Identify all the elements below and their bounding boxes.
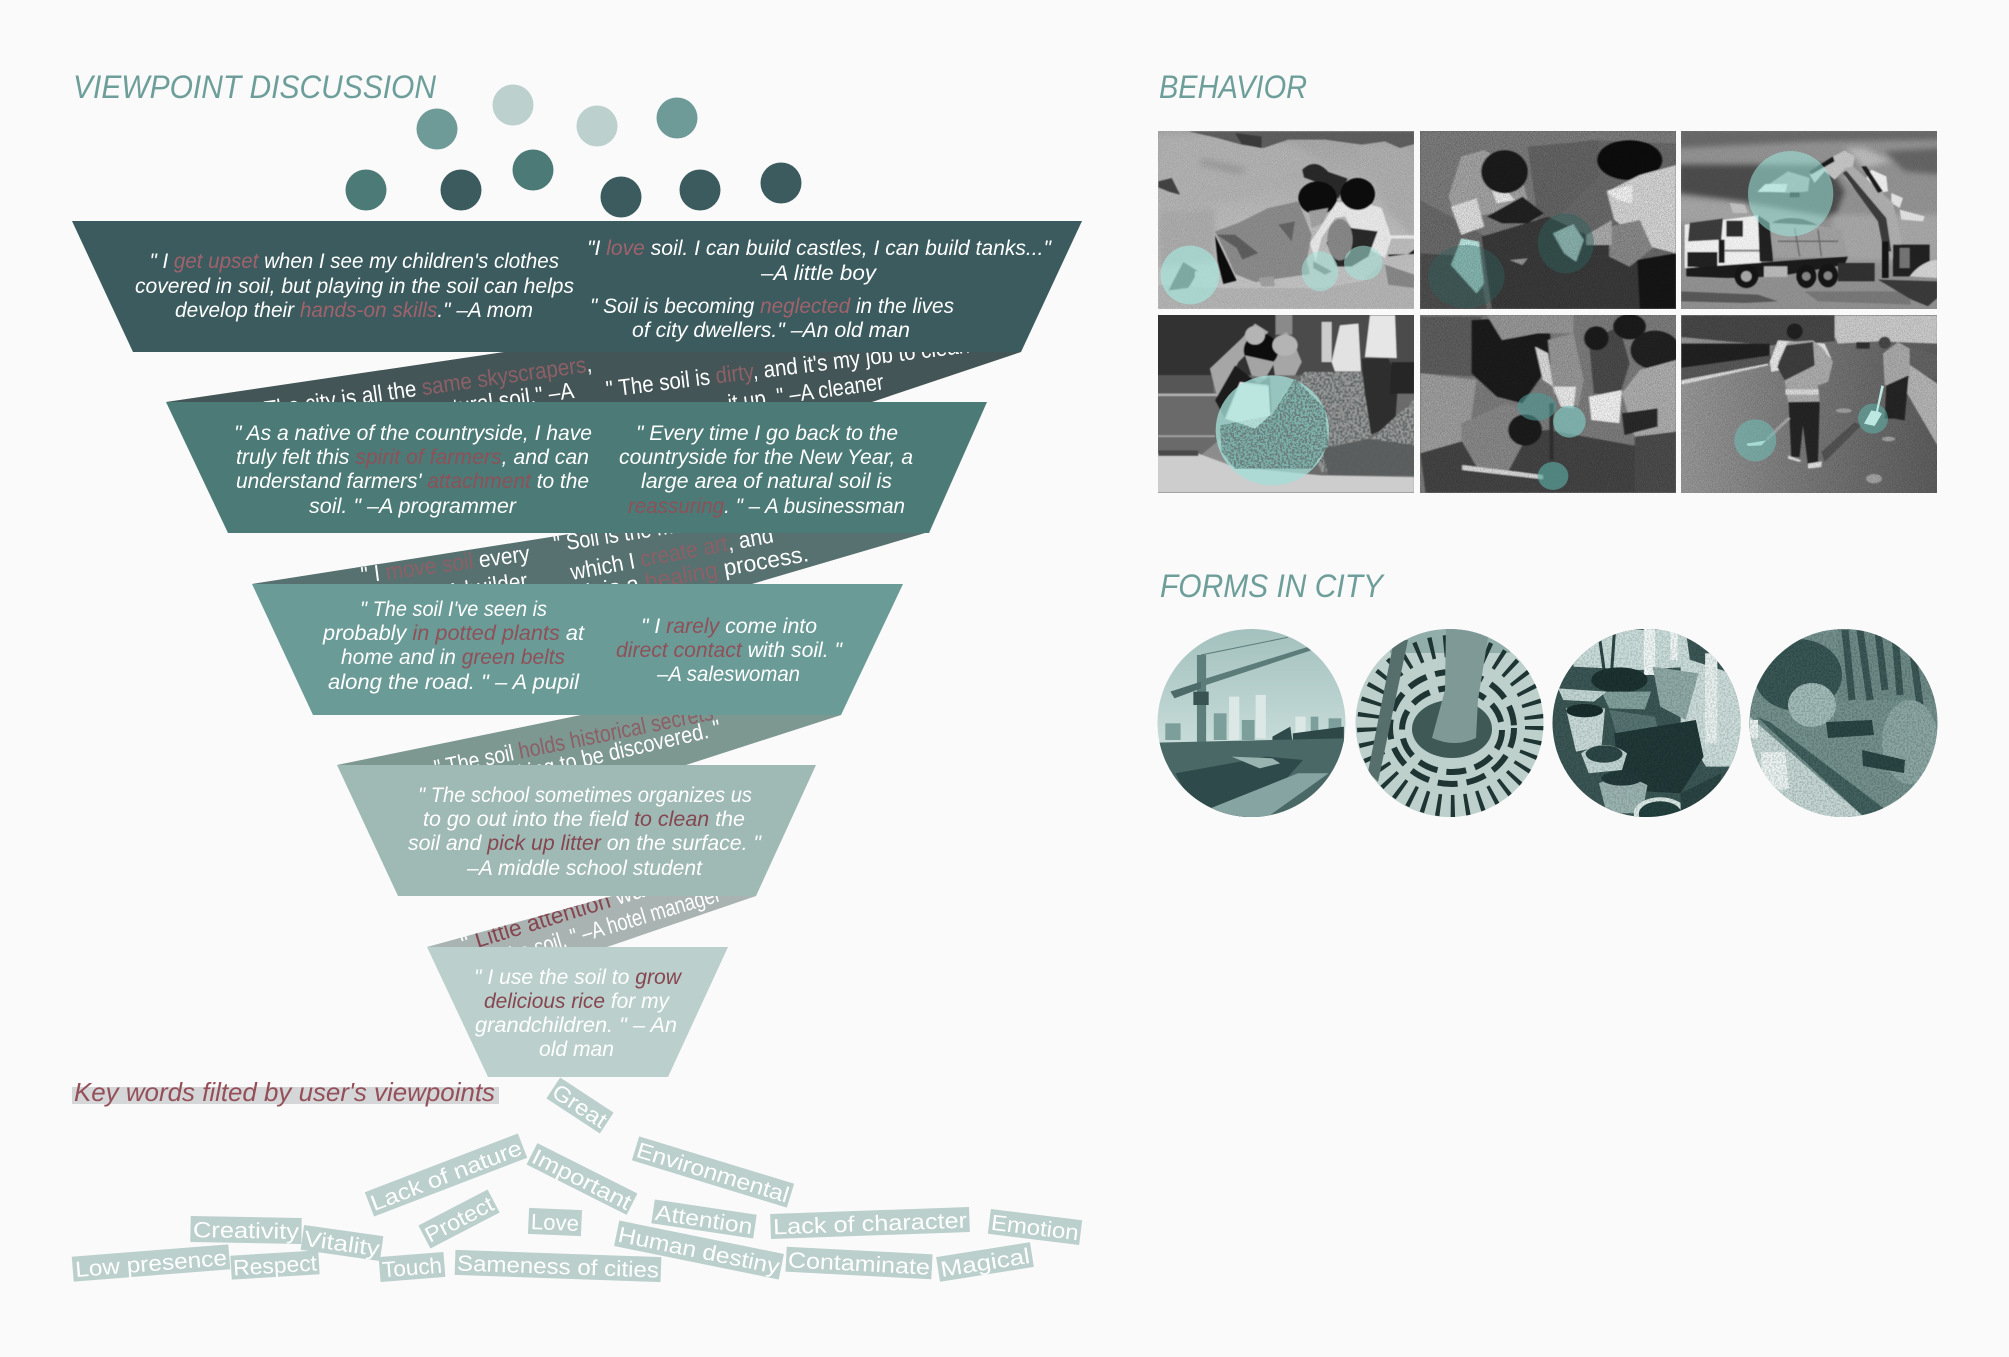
funnel tier 2: soil. " –A programmer <box>309 495 517 518</box>
funnel tier 1: –A little boy <box>760 262 878 285</box>
photo: excavator loading dump truck <box>1678 128 1941 311</box>
funnel band 3 back side: waiting to be discovered. " <box>490 714 723 792</box>
funnel tier 2: countryside for the New Year, a <box>619 446 913 469</box>
keyword tags: Touch <box>381 1253 443 1282</box>
funnel band 2 back side: " I move soil every <box>359 540 532 588</box>
keyword tags: Sameness of cities <box>457 1250 659 1283</box>
funnel band 4 back side: " Little attention was paid <box>458 859 705 957</box>
funnel tier 3: direct contact with soil. " <box>616 639 844 662</box>
circle photo: potted plants on balcony <box>1552 629 1740 817</box>
keyword tags: Environmental <box>634 1137 792 1208</box>
funnel band 1 back side: " The soil is dirty, and it's my job to clean <box>604 332 971 402</box>
funnel band 2 back side: which I create art, and <box>567 521 775 585</box>
funnel tier 5: old man <box>539 1038 614 1061</box>
funnel tier 5: " I use the soil to grow <box>474 966 683 989</box>
funnel band 1 back side: it up. " –A cleaner <box>726 368 885 416</box>
funnel tier 4 <box>337 765 816 896</box>
panel: behavior photos <box>1155 128 1941 495</box>
heading: behavior: BEHAVIOR <box>1159 69 1307 105</box>
funnel tier 4: " The school sometimes organizes us <box>418 784 752 807</box>
funnel tier 2: " As a native of the countryside, I have <box>234 422 592 445</box>
funnel band 2 back side: it is a healing process. <box>584 540 810 605</box>
funnel tier 3: along the road. " – A pupil <box>328 671 580 694</box>
photo: girls planting in soil <box>1415 128 1681 312</box>
keyword tags: Great <box>548 1079 612 1133</box>
keyword tags: Respect <box>232 1250 318 1281</box>
funnel band 4 back side: to the soil. " –A hotel manager <box>482 880 724 975</box>
funnel tier 2 <box>166 402 987 533</box>
keyword tags: Protect <box>421 1191 498 1248</box>
funnel band 3 back side <box>337 715 841 765</box>
keyword tags: Attention <box>654 1200 754 1239</box>
funnel tier 5 <box>427 947 728 1077</box>
funnel tier 1: develop their hands-on skills." –A mom <box>175 299 533 322</box>
funnel tier 1: "I love soil. I can build castles, I can build tanks..." <box>587 237 1053 260</box>
funnel band 1 back side: with no natural soil." –A <box>356 377 576 433</box>
funnel tier 2: understand farmers' attachment to the <box>236 470 589 493</box>
funnel tier 2: reassuring. " – A businessman <box>628 495 905 518</box>
keyword tags <box>72 1077 1082 1283</box>
funnel band 4 back side <box>427 896 756 947</box>
funnel tier 5: grandchildren. " – An <box>475 1014 677 1037</box>
circle photo: green belt beside road <box>1745 625 1945 820</box>
funnel tier 2: large area of natural soil is <box>641 470 892 493</box>
funnel tier 1: " I get upset when I see my children's clothes <box>150 250 559 273</box>
keyword tags: Creativity <box>193 1217 299 1244</box>
funnel tier 3: home and in green belts <box>341 646 565 669</box>
funnel tier 5: delicious rice for my <box>484 990 670 1013</box>
funnel tier 2: truly felt this spirit of farmers, and can <box>236 446 589 469</box>
key words caption: Key words filted by user's viewpoints <box>74 1077 495 1107</box>
funnel tier 3: " I rarely come into <box>641 615 817 638</box>
funnel band 2 back side: " Soil is the material in <box>552 501 748 557</box>
funnel tier 4: –A middle school student <box>466 857 703 880</box>
funnel of viewpoints <box>72 221 1082 1077</box>
funnel tier 2: " Every time I go back to the <box>636 422 898 445</box>
keyword tags: Magical <box>939 1243 1031 1282</box>
photo: long jumper landing in sand <box>1155 312 1418 495</box>
keyword tags: Contaminate <box>787 1247 931 1280</box>
funnel tier 1: " Soil is becoming neglected in the lives <box>590 295 954 318</box>
heading: viewpoint discussion: VIEWPOINT DISCUSSION <box>73 69 437 105</box>
keyword tags: Low presence <box>74 1245 228 1282</box>
keyword tags: Lack of character <box>773 1208 967 1239</box>
circle photo: construction site with crane <box>1155 625 1350 820</box>
heading: forms in city: FORMS IN CITY <box>1160 568 1385 604</box>
funnel band 1 back side: " The city is all the same skyscrapers, <box>250 350 593 424</box>
funnel tier 1 <box>72 221 1082 352</box>
keyword tags: Love <box>530 1209 580 1236</box>
funnel tier 1: of city dwellers." –An old man <box>632 319 910 342</box>
funnel tier 3 <box>252 584 903 715</box>
funnel tier 3: –A saleswoman <box>656 663 800 686</box>
funnel tier 4: to go out into the field to clean the <box>423 808 745 831</box>
keyword tags: Emotion <box>990 1210 1080 1245</box>
funnel tier 1: covered in soil, but playing in the soil can helps <box>135 275 574 298</box>
funnel tier 3: probably in potted plants at <box>322 622 585 645</box>
panel: forms in city circles <box>1155 625 1945 829</box>
funnel band 1 back side <box>166 352 1021 402</box>
keyword tags: Lack of nature <box>367 1135 525 1216</box>
funnel band 2 back side <box>252 533 925 584</box>
keyword tags: Human destiny <box>616 1222 782 1279</box>
funnel band 3 back side: " The soil holds historical secrets <box>432 699 715 781</box>
funnel tier 4: soil and pick up litter on the surface. " <box>408 832 763 855</box>
photo: children planting a tree <box>1415 312 1681 495</box>
falling viewpoint dots <box>346 84 802 218</box>
funnel tier 3: " The soil I've seen is <box>360 598 547 621</box>
photo: children digging in sand <box>1155 128 1418 311</box>
keyword tags: Vitality <box>303 1226 381 1261</box>
funnel band 2 back side: day. " –A builder <box>377 567 529 615</box>
keyword tags: Important <box>528 1144 636 1215</box>
circle photo: tree grate <box>1350 625 1550 820</box>
photo: road sweepers with shovels <box>1678 312 1941 495</box>
